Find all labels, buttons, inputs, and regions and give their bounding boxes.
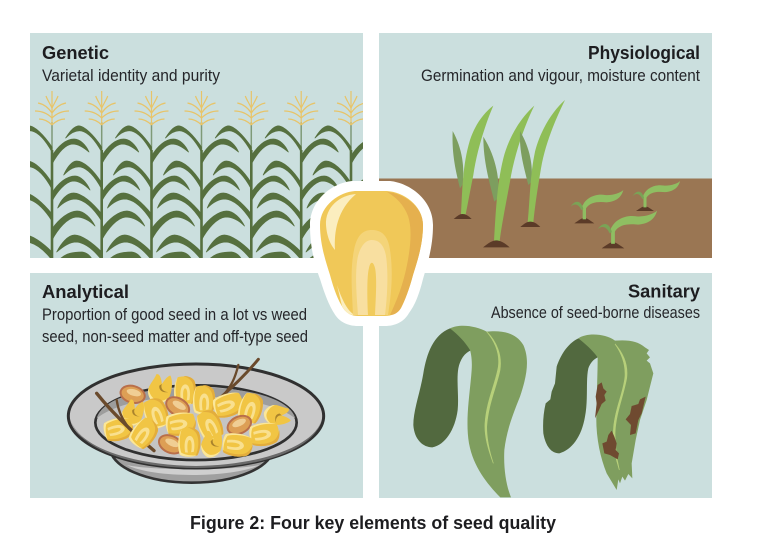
kernel germ: [352, 230, 392, 315]
twig: left: [97, 393, 154, 451]
seeds and kernels: back row: [102, 373, 215, 444]
twig: right: [202, 359, 258, 413]
kernel body: [320, 191, 423, 316]
heading: physiological: Physiological: [588, 43, 700, 63]
plate: [68, 364, 324, 483]
seeds and kernels: front row: [126, 389, 291, 458]
diseased leaf: [543, 335, 653, 490]
illustration: row of maize plants: [30, 91, 363, 258]
heading: analytical: Analytical: [42, 282, 129, 302]
illustration: plate of seed: [68, 359, 324, 483]
heading: sanitary: Sanitary: [628, 282, 700, 302]
illustration: seedlings: [453, 100, 680, 248]
panel: analytical: seed, non-seed matter and off-type seed: [42, 328, 308, 346]
caption: Figure 2: Four key elements of seed quality: [190, 513, 556, 533]
text: physiological description: Germination and vigour, moisture content: [421, 67, 700, 85]
panel: genetic: [30, 33, 363, 258]
healthy leaf: [413, 326, 527, 497]
tall seedlings: [453, 100, 565, 247]
text: analytical description: Proportion of good seed in a lot vs weed: [42, 306, 307, 324]
panel: analytical: [30, 273, 363, 498]
white kernel outline: [310, 181, 433, 326]
panel: physiological: [379, 33, 712, 258]
text: genetic description: Varietal identity and purity: [42, 67, 221, 85]
heading: genetic: Genetic: [42, 43, 109, 63]
soil band: [379, 178, 712, 258]
kernel shading: [387, 192, 423, 315]
illustration: healthy and diseased leaves: [413, 326, 653, 497]
panel: sanitary: [379, 273, 712, 498]
text: sanitary description: Absence of seed-borne diseases: [491, 304, 700, 322]
kernel highlight: [326, 194, 356, 250]
central maize kernel emblem: [310, 181, 433, 326]
small sprouts: [571, 190, 623, 223]
